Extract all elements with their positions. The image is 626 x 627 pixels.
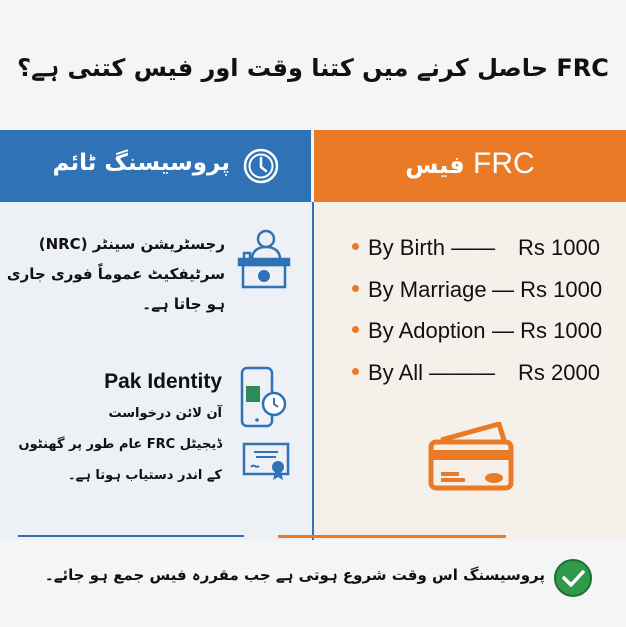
fee list: By Marriage bbox=[368, 277, 487, 302]
item: Pak Identity: آن لائن درخواست bbox=[108, 406, 222, 421]
header: FRC fees: فیس FRC bbox=[405, 147, 535, 180]
bottom rule blue bbox=[18, 535, 244, 537]
fee list: Rs 2000 bbox=[518, 360, 600, 385]
title: FRC حاصل کرنے میں کتنا وقت اور فیس کتنی ہے؟ bbox=[17, 54, 609, 82]
fee list: Rs 1000 bbox=[518, 235, 600, 260]
item: NRC: سرٹیفکیٹ عموماً فوری جاری bbox=[7, 265, 225, 283]
vertical divider bbox=[312, 202, 314, 540]
panel: FRC fees bbox=[314, 130, 626, 540]
header: processing time bbox=[0, 130, 311, 202]
icon: check bbox=[554, 559, 592, 597]
header text: پروسیسنگ ٹائم bbox=[52, 150, 230, 176]
item: Pak Identity: کے اندر دستیاب ہوتا ہے۔ bbox=[68, 468, 222, 483]
icon: phone with clock bbox=[240, 366, 286, 428]
fee list bbox=[352, 235, 602, 385]
icon: certificate bbox=[242, 442, 290, 480]
fee list: By Adoption bbox=[368, 318, 485, 343]
panel: processing time bbox=[0, 130, 313, 540]
fee list: By All ——— bbox=[368, 360, 495, 385]
footer note: پروسیسنگ اس وقت شروع ہوتی ہے جب مقررہ فیس جمع ہو جائے۔ bbox=[45, 566, 545, 584]
orange rule bbox=[278, 535, 506, 538]
footer note bbox=[45, 559, 592, 597]
icon: clock bbox=[244, 148, 278, 184]
fee list: — Rs 1000 bbox=[492, 318, 602, 343]
icon: registration desk bbox=[238, 230, 290, 288]
item: Pak Identity: ڈیجیٹل FRC عام طور پر گھنٹوں bbox=[19, 437, 222, 452]
item: NRC: ہو جاتا ہے۔ bbox=[142, 295, 225, 313]
fee list: By Birth —— bbox=[368, 235, 495, 260]
item: NRC bbox=[7, 230, 290, 313]
item: Pak Identity bbox=[19, 366, 290, 483]
item: Pak Identity: Pak Identity bbox=[104, 370, 222, 393]
fee list: — Rs 1000 bbox=[492, 277, 602, 302]
item: NRC: رجسٹریشن سینٹر (NRC) bbox=[39, 235, 225, 253]
header: FRC fees bbox=[314, 130, 626, 202]
icon: credit card bbox=[428, 422, 514, 490]
